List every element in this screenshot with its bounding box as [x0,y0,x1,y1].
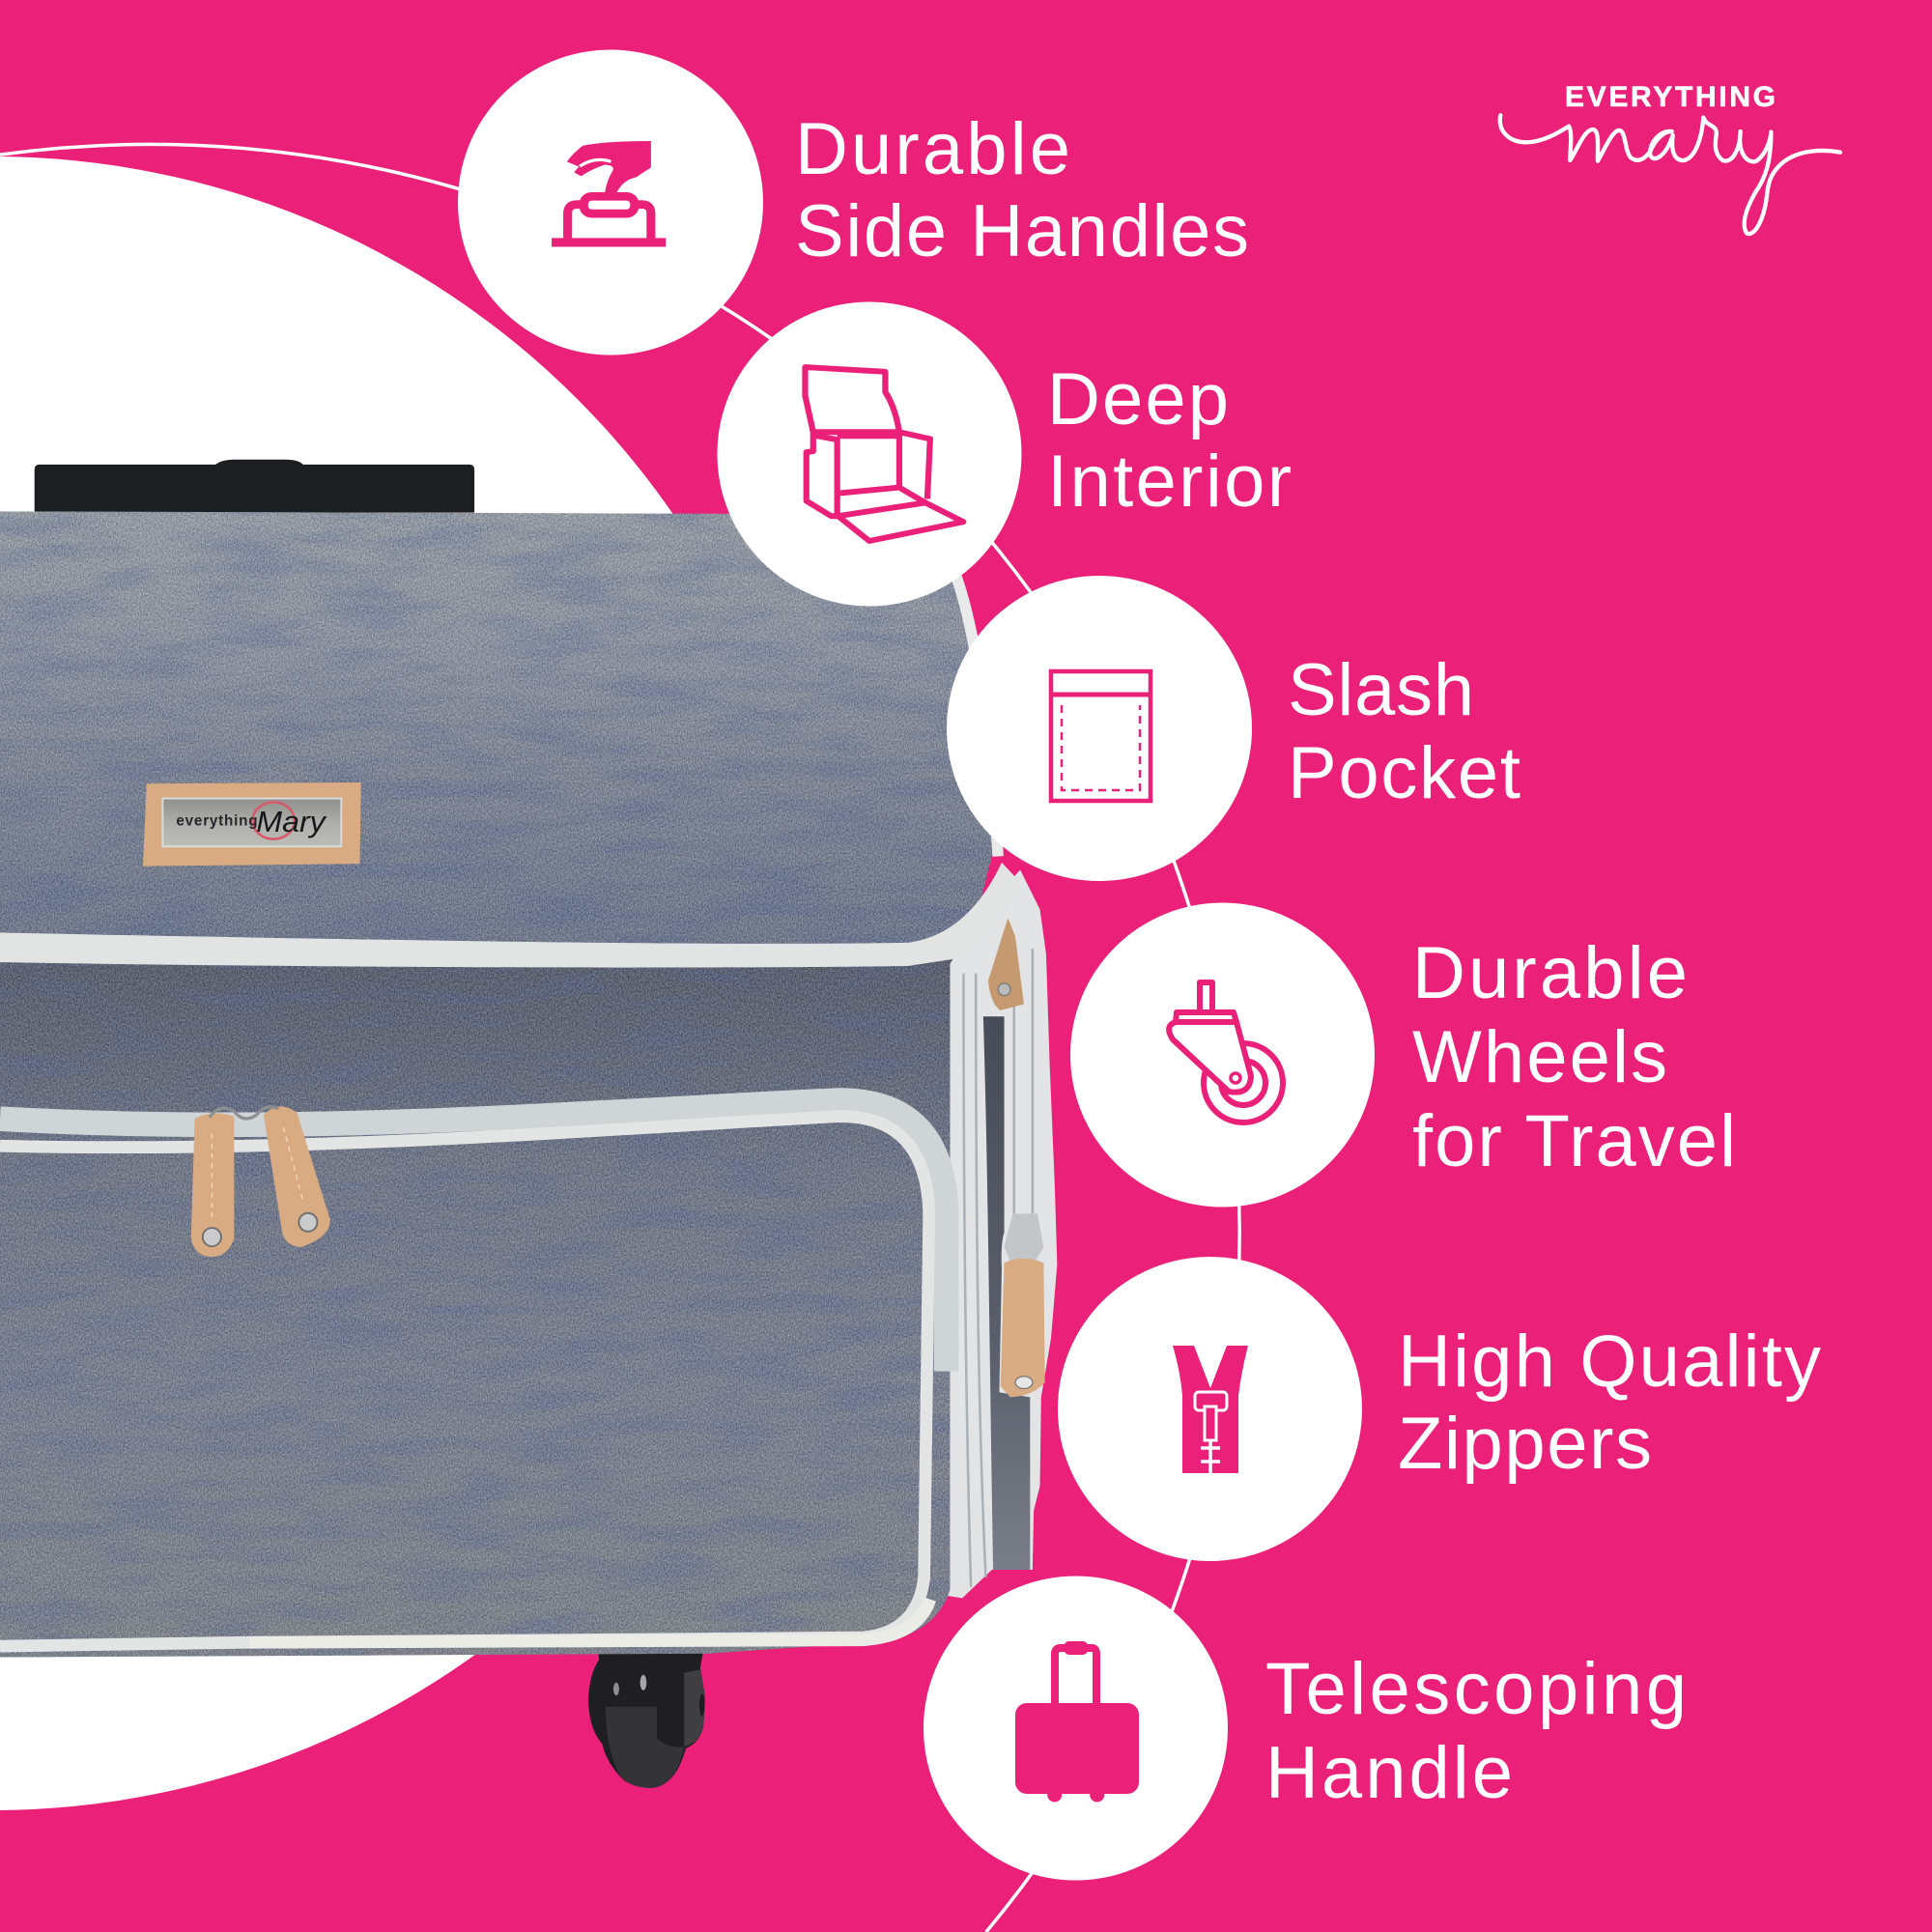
lid right edge trim [955,573,998,856]
telescoping handle base [35,460,474,513]
fabric body and lid [0,505,1010,1663]
label: high quality zippers: Zippers [1398,1403,1652,1485]
label: telescoping handle [1265,1648,1687,1814]
label: durable wheels for travel [1412,932,1736,1182]
feature circle 4: durable wheels [1070,902,1375,1208]
label: durable wheels for travel: for Travel [1412,1100,1736,1182]
leather logo badge: everything [176,813,258,830]
feature circle 1: durable side handles [458,50,763,355]
product: rolling case [0,460,1057,1788]
label: telescoping handle: Telescoping [1265,1648,1687,1730]
feature circle 2: deep interior [717,301,1022,607]
side zipper pull upper [988,918,1024,1010]
label: deep interior: Deep [1047,358,1229,440]
label: durable side handles: Durable [795,108,1070,190]
side zipper stripes [963,936,1033,1587]
icon: hand lifting a handle [552,141,666,246]
leather logo badge [143,782,361,867]
bottom trim stripe [249,1600,930,1642]
leather logo badge: Mary [256,806,327,838]
pocket zipper band [0,1100,947,1372]
lid piping [0,863,1020,968]
icon: slash pocket [1051,671,1151,801]
label: high quality zippers: High Quality [1398,1321,1821,1403]
label: high quality zippers [1398,1321,1821,1485]
brand logo: EVERYTHING [1565,81,1776,113]
brand logo [1500,81,1840,234]
zipper connector rings [210,1107,278,1119]
label: durable wheels for travel: Wheels [1412,1016,1667,1098]
label: durable side handles: Side Handles [795,190,1249,272]
icon: wheeled suitcase [1015,1641,1139,1803]
zipper pull right [264,1106,330,1247]
feature circle 6: telescoping handle [923,1577,1228,1880]
zipper pull left [191,1113,234,1257]
label: telescoping handle: Handle [1265,1732,1513,1814]
icon: caster wheel [1169,982,1283,1122]
label: slash pocket: Pocket [1288,732,1520,814]
icon: zipper [1173,1346,1248,1474]
label: durable side handles [795,108,1249,272]
connector arc linking the feature circles [0,144,1239,1932]
pocket piping [0,1117,929,1646]
label: durable wheels for travel: Durable [1412,932,1688,1014]
side zipper pull lower [1001,1213,1045,1397]
label: slash pocket [1288,649,1520,814]
label: slash pocket: Slash [1288,649,1474,731]
icon: open case interior [805,367,963,541]
side panel dark channel [983,1016,1030,1570]
label: deep interior [1047,358,1292,523]
feature circle 5: high quality zippers [1058,1257,1362,1561]
white arc backdrop [0,156,819,1810]
caster wheel [588,1635,706,1788]
logo script: mary [1500,115,1840,234]
feature circle 3: slash pocket [947,576,1252,881]
side zipper panel [930,870,1057,1598]
label: deep interior: Interior [1047,440,1292,523]
